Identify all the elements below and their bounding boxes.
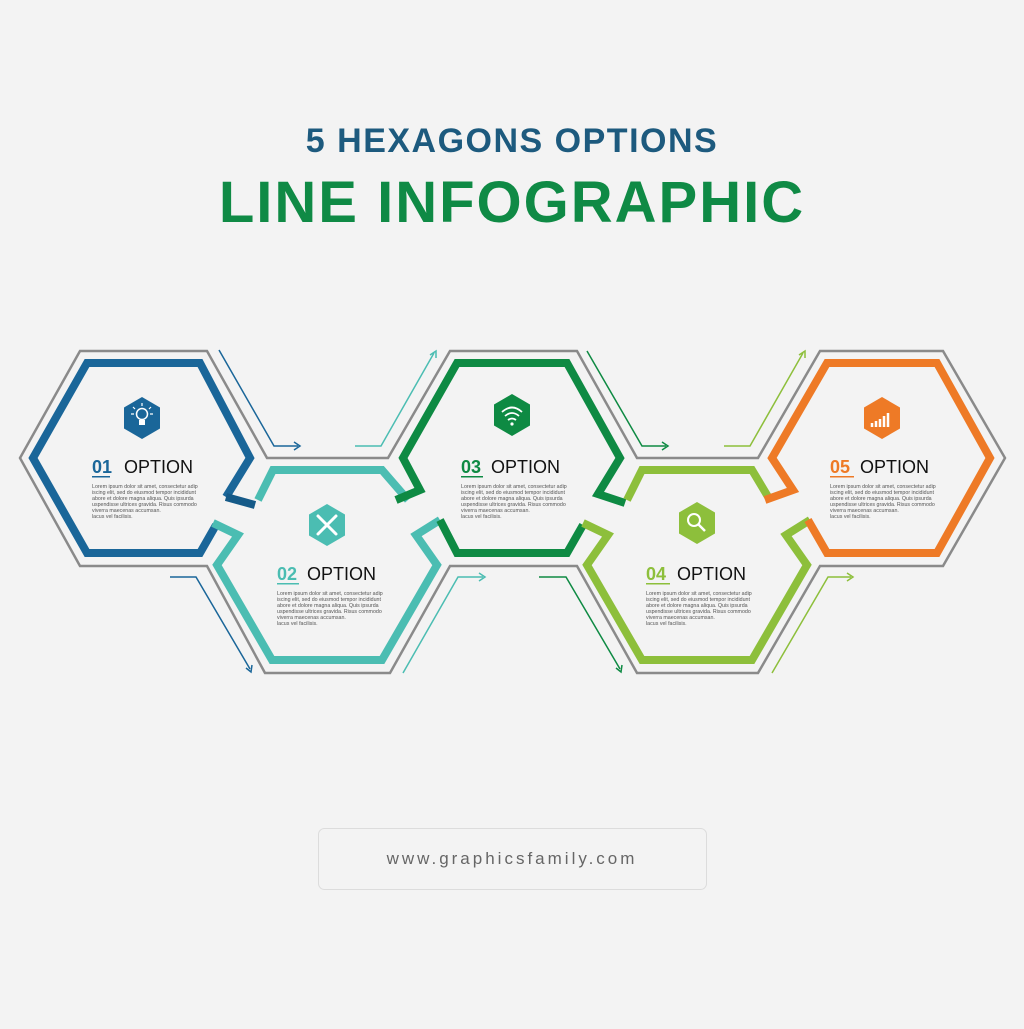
gray outline frame <box>20 351 1005 673</box>
lorem text blocks: iscing elit, sed do eiusmod tempor incididunt <box>830 490 934 496</box>
hexagon 1 <box>33 363 255 553</box>
icon: wifi <box>494 394 530 436</box>
lorem text blocks: Lorem ipsum dolor sit amet, consectetur adip <box>830 484 936 490</box>
lorem text blocks: lacus vel facilisis. <box>277 621 318 627</box>
lorem text blocks: uspendisse ultrices gravida. Risus commodo <box>277 609 382 615</box>
lorem text blocks: viverra maecenas accumsan. <box>92 508 161 514</box>
lorem text blocks: lacus vel facilisis. <box>92 514 133 520</box>
lorem text blocks: viverra maecenas accumsan. <box>830 508 899 514</box>
icon: chart <box>864 397 900 439</box>
option texts: OPTION <box>860 457 929 477</box>
lorem text blocks: uspendisse ultrices gravida. Risus commodo <box>92 502 197 508</box>
lorem text blocks: iscing elit, sed do eiusmod tempor incididunt <box>92 490 196 496</box>
title: LINE INFOGRAPHIC <box>219 170 805 235</box>
lorem text blocks: viverra maecenas accumsan. <box>646 615 715 621</box>
lorem text blocks: uspendisse ultrices gravida. Risus commodo <box>830 502 935 508</box>
lorem text blocks: iscing elit, sed do eiusmod tempor incididunt <box>646 597 750 603</box>
title: 5 HEXAGONS OPTIONS <box>306 122 718 160</box>
lorem text blocks: Lorem ipsum dolor sit amet, consectetur adip <box>277 591 383 597</box>
icon: tools <box>309 504 345 546</box>
icon: lightbulb <box>124 397 160 439</box>
lorem text blocks: abore et dolore magna aliqua. Quis ipsurda <box>646 603 748 609</box>
lorem text blocks: abore et dolore magna aliqua. Quis ipsurda <box>830 496 932 502</box>
hexagon 3 <box>396 363 625 553</box>
lorem text blocks: abore et dolore magna aliqua. Quis ipsurda <box>92 496 194 502</box>
option texts: 04 <box>646 564 666 584</box>
lorem text blocks: abore et dolore magna aliqua. Quis ipsurda <box>461 496 563 502</box>
option texts: OPTION <box>677 564 746 584</box>
lorem text blocks: iscing elit, sed do eiusmod tempor incididunt <box>277 597 381 603</box>
lorem text blocks: lacus vel facilisis. <box>646 621 687 627</box>
lorem text blocks: abore et dolore magna aliqua. Quis ipsurda <box>277 603 379 609</box>
option texts: 01 <box>92 457 112 477</box>
hexagon 2 <box>213 470 440 660</box>
option texts: 02 <box>277 564 297 584</box>
title <box>219 122 805 235</box>
hexagon 5 <box>765 363 990 553</box>
option texts: OPTION <box>307 564 376 584</box>
hexagon 4 <box>583 470 810 660</box>
option texts: 05 <box>830 457 850 477</box>
option texts <box>92 457 929 584</box>
lorem text blocks: uspendisse ultrices gravida. Risus commodo <box>461 502 566 508</box>
option texts: 03 <box>461 457 481 477</box>
lorem text blocks: viverra maecenas accumsan. <box>461 508 530 514</box>
lorem text blocks <box>92 484 936 627</box>
icon: magnifier <box>679 502 715 544</box>
option texts: OPTION <box>124 457 193 477</box>
lorem text blocks: Lorem ipsum dolor sit amet, consectetur adip <box>461 484 567 490</box>
lorem text blocks: Lorem ipsum dolor sit amet, consectetur adip <box>646 591 752 597</box>
lorem text blocks: uspendisse ultrices gravida. Risus commodo <box>646 609 751 615</box>
lorem text blocks: viverra maecenas accumsan. <box>277 615 346 621</box>
footer url box: www.graphicsfamily.com <box>386 849 637 868</box>
arrows <box>170 350 853 673</box>
footer url box <box>318 828 706 890</box>
lorem text blocks: lacus vel facilisis. <box>830 514 871 520</box>
option texts: OPTION <box>491 457 560 477</box>
lorem text blocks: Lorem ipsum dolor sit amet, consectetur adip <box>92 484 198 490</box>
lorem text blocks: lacus vel facilisis. <box>461 514 502 520</box>
lorem text blocks: iscing elit, sed do eiusmod tempor incididunt <box>461 490 565 496</box>
